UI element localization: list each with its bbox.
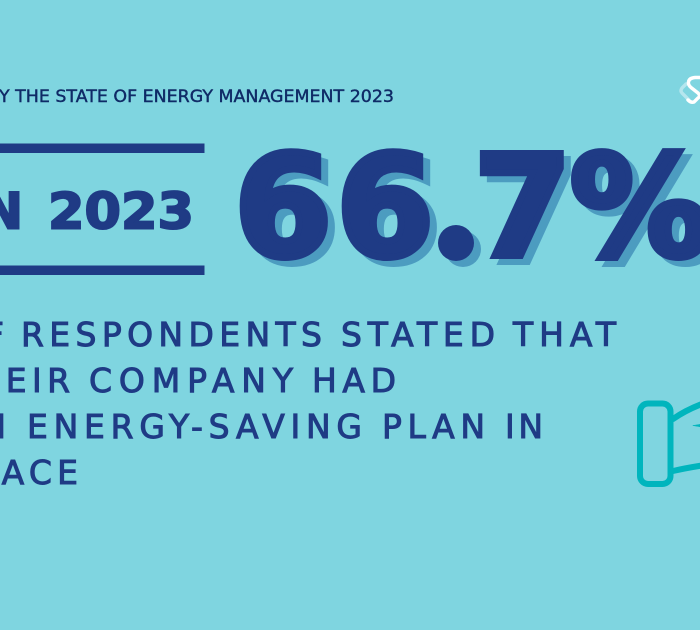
description line 2: HAD bbox=[312, 361, 396, 400]
statistic value: 6 bbox=[234, 126, 332, 290]
year badge bbox=[0, 144, 204, 275]
statistic shadow bbox=[242, 132, 700, 296]
big statistic with drop shadow bbox=[234, 126, 700, 296]
description line 3 bbox=[0, 407, 543, 446]
description line 2 bbox=[0, 361, 396, 400]
badge top rule bbox=[0, 144, 204, 153]
badge bottom rule bbox=[0, 266, 204, 275]
statistic shadow: 6 bbox=[242, 132, 339, 296]
statistic shadow: . bbox=[460, 216, 479, 274]
statistic shadow: 6 bbox=[344, 132, 441, 296]
description line 3: PLAN bbox=[382, 407, 485, 446]
statistic value: 7 bbox=[474, 126, 571, 290]
description line 1 bbox=[0, 315, 617, 354]
icon: brand logo bbox=[681, 78, 700, 102]
description line 1: THAT bbox=[512, 315, 617, 354]
statistic shadow: 7 bbox=[481, 132, 578, 296]
description line 1: STATED bbox=[341, 315, 495, 354]
description line 1: RESPONDENTS bbox=[21, 315, 322, 354]
description line 3: ENERGY-SAVING bbox=[27, 407, 362, 446]
description line 3: IN bbox=[505, 407, 543, 446]
statistic value: 6 bbox=[336, 126, 434, 290]
badge year: 2023 bbox=[48, 182, 194, 240]
description text bbox=[0, 315, 617, 492]
statistic value bbox=[234, 126, 700, 290]
icon: megaphone bbox=[640, 404, 700, 484]
description line 2: COMPANY bbox=[89, 361, 294, 400]
statistic value: . bbox=[453, 210, 472, 268]
